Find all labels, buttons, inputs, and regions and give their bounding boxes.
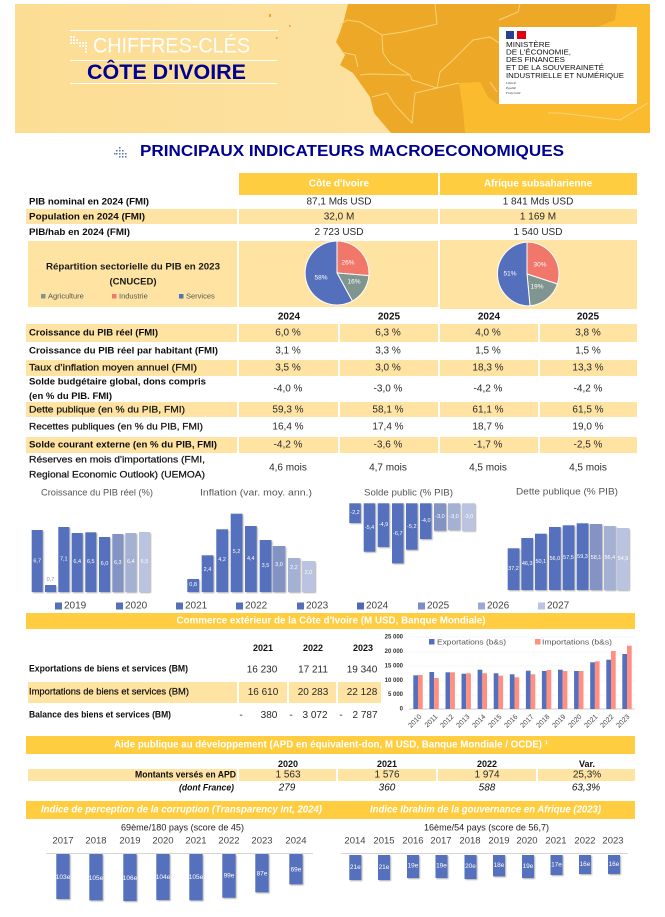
bar chart: public debt: 59,3 bbox=[577, 554, 588, 560]
table: macro indicators: Dette publique (en % du PIB, FMI) bbox=[29, 404, 185, 416]
bar chart: real GDP growth: Croissance du PIB réel (%) bbox=[41, 488, 153, 498]
pie chart: sub-Saharan Africa: 51% bbox=[503, 270, 517, 278]
table: macro indicators: 6,3 % bbox=[375, 328, 401, 338]
table: development aid: 360 bbox=[379, 782, 396, 794]
table: headline indicators: PIB/hab en 2024 (FMI) bbox=[29, 227, 130, 238]
table: macro indicators: Taux d’inflation moyen annuel (FMI) bbox=[29, 362, 197, 374]
table: macro indicators: 61,5 % bbox=[572, 404, 604, 416]
table: headline indicators: 1 841 Mds USD bbox=[503, 196, 573, 208]
chart legend: years: 2026 bbox=[487, 600, 510, 612]
table: macro indicators: 13,3 % bbox=[572, 362, 604, 374]
table: macro indicators: Regional Economic Outlook) (UEMOA) bbox=[29, 470, 205, 480]
table: macro indicators: -3,0 % bbox=[374, 384, 403, 394]
table: headline indicators bbox=[26, 173, 637, 238]
table: trade: Balance des biens et services (BM) bbox=[29, 710, 171, 720]
table: trade: 16 230 bbox=[247, 664, 278, 676]
chart legend: years: 2023 bbox=[306, 600, 329, 612]
bar chart: inflation: 5,2 bbox=[233, 549, 240, 555]
bar chart: Ibrahim governance rank: 20e bbox=[465, 863, 476, 870]
bar chart: corruption perception rank: 103e bbox=[56, 874, 71, 881]
bar chart: exports and imports: 2019 bbox=[552, 713, 568, 729]
table: development aid: 1 576 bbox=[374, 770, 400, 780]
chart legend: years: 2020 bbox=[125, 600, 148, 612]
table: macro indicators: -3,6 % bbox=[374, 440, 403, 450]
bar chart: exports and imports: 2012 bbox=[440, 713, 456, 729]
table: headline indicators: 1 169 M bbox=[520, 212, 556, 222]
bar chart: exports and imports bbox=[385, 634, 635, 729]
chart legend: years: 2019 bbox=[64, 600, 87, 612]
table: macro indicators: 3,0 % bbox=[375, 362, 401, 374]
table: macro indicators: 4,0 % bbox=[475, 328, 501, 338]
bar chart: exports and imports: 0 bbox=[400, 706, 404, 712]
bar chart: Ibrahim governance rank: 2023 bbox=[602, 836, 624, 846]
bar chart: corruption perception rank: 87e bbox=[257, 870, 268, 878]
table: trade: 2022 bbox=[303, 643, 323, 653]
table: headline indicators: 87,1 Mds USD bbox=[306, 196, 372, 208]
bar chart: exports and imports: 2023 bbox=[616, 713, 632, 729]
table: macro indicators: 16,4 % bbox=[272, 422, 304, 432]
bar chart: public debt: 54,9 bbox=[618, 556, 628, 562]
pie chart: Côte d'Ivoire bbox=[305, 241, 369, 305]
bar chart: corruption perception rank bbox=[46, 822, 313, 901]
decorative dots beside title bbox=[70, 36, 87, 53]
ministry logo: Égalité bbox=[505, 85, 517, 90]
pie chart: sub-Saharan Africa bbox=[497, 242, 559, 306]
table: macro indicators: 4,5 mois bbox=[569, 462, 607, 474]
bar chart: corruption perception rank: 2019 bbox=[119, 836, 141, 846]
ministry logo: DE L'ÉCONOMIE, bbox=[506, 48, 571, 56]
bar chart: exports and imports: 2021 bbox=[584, 713, 600, 729]
icon: heading dots bbox=[114, 147, 126, 158]
bar chart: exports and imports: 2020 bbox=[568, 713, 584, 729]
heading: principaux indicateurs: PRINCIPAUX INDICATEURS MACROECONOMIQUES bbox=[140, 143, 564, 160]
table: macro indicators: 2025 bbox=[378, 312, 401, 322]
chart legend: years bbox=[55, 600, 570, 612]
section header: trade bbox=[26, 613, 635, 629]
bar chart: corruption perception rank: 106e bbox=[123, 875, 138, 882]
bar chart: inflation: 0,8 bbox=[189, 582, 197, 588]
table: development aid: Montants versés en APD bbox=[135, 770, 236, 780]
pie legend: Agriculture bbox=[48, 292, 84, 300]
table: macro indicators: -4,2 % bbox=[474, 384, 503, 394]
table: macro indicators: 61,1 % bbox=[472, 404, 504, 416]
table: development aid: Var. bbox=[579, 759, 595, 769]
bar chart: Ibrahim governance rank: 19e bbox=[408, 862, 419, 870]
bar chart: exports and imports: 2014 bbox=[472, 713, 488, 729]
table: trade: Importations de biens et services (BM) bbox=[29, 686, 189, 698]
pie chart: sub-Saharan Africa: 30% bbox=[533, 262, 547, 268]
bar chart: Ibrahim governance rank bbox=[341, 822, 628, 880]
bar chart: corruption perception rank: 104e bbox=[156, 874, 171, 881]
bar chart: exports and imports: 20 000 bbox=[385, 649, 404, 655]
bar chart: exports and imports: 2011 bbox=[424, 713, 440, 729]
table: headline indicators: 1 540 USD bbox=[514, 227, 562, 238]
section header: governance indices bbox=[26, 801, 635, 819]
table: trade: 22 128 bbox=[347, 687, 378, 698]
bar chart: inflation: 3,0 bbox=[275, 562, 283, 568]
table: trade bbox=[28, 643, 381, 721]
banner bbox=[15, 4, 650, 133]
bar chart: corruption perception rank: 105e bbox=[189, 874, 204, 881]
bar chart: corruption perception rank: 105e bbox=[89, 875, 104, 882]
map of West Africa bbox=[336, 4, 650, 133]
ministry logo: Fraternité bbox=[505, 91, 521, 95]
section header: development aid: Aide publique au développement (APD en équivalent-don, M USD, Banque Mondiale / OCDE) ¹ bbox=[114, 740, 549, 750]
bar chart: public debt: 56,4 bbox=[604, 555, 615, 561]
pie chart: sub-Saharan Africa: 19% bbox=[530, 284, 544, 290]
table: macro indicators: 58,1 % bbox=[372, 404, 404, 416]
bar chart: corruption perception rank: 2022 bbox=[218, 836, 240, 846]
bar chart: Ibrahim governance rank: 17e bbox=[551, 862, 562, 868]
ministry logo: DES FINANCES bbox=[506, 55, 565, 64]
bar chart: Ibrahim governance rank: 21e bbox=[350, 864, 361, 871]
bar chart: public balance: -4,0 bbox=[421, 518, 431, 524]
table: macro indicators: 3,8 % bbox=[575, 328, 601, 338]
bar chart: Ibrahim governance rank: 16ème/54 pays (score de 56,7) bbox=[424, 822, 549, 834]
bar chart: corruption perception rank: 2021 bbox=[185, 836, 207, 846]
bar chart: inflation: 2,2 bbox=[290, 565, 298, 571]
table: macro indicators: 4,6 mois bbox=[269, 462, 307, 474]
pie chart: Côte d'Ivoire: 16% bbox=[347, 278, 361, 286]
bar chart: Ibrahim governance rank: 19e bbox=[523, 863, 534, 870]
bar chart: Ibrahim governance rank: 19e bbox=[436, 862, 447, 870]
bar chart: public balance: -6,7 bbox=[393, 531, 403, 537]
bar chart: public debt: 46,3 bbox=[522, 561, 533, 567]
table: macro indicators: 4,7 mois bbox=[369, 462, 407, 474]
table: trade: 17 211 bbox=[298, 664, 328, 676]
pie legend: Services bbox=[186, 292, 215, 300]
bar chart: real GDP growth: 0,7 bbox=[47, 577, 54, 583]
table: macro indicators: 3,5 % bbox=[275, 362, 301, 374]
bar chart: Ibrahim governance rank: 2019 bbox=[488, 836, 510, 846]
bar chart: Ibrahim governance rank: 2014 bbox=[344, 836, 366, 846]
table: trade: 2021 bbox=[253, 643, 273, 653]
bar chart: corruption perception rank: 2024 bbox=[285, 836, 307, 846]
bar chart: public balance: -5,4 bbox=[365, 525, 374, 531]
islands bbox=[269, 14, 290, 39]
bar chart: inflation: 4,2 bbox=[218, 557, 226, 563]
table: headline indicators: PIB nominal en 2024 (FMI) bbox=[29, 196, 149, 208]
table: macro indicators bbox=[26, 312, 637, 480]
ministry logo: INDUSTRIELLE ET NUMÉRIQUE bbox=[506, 71, 624, 80]
bar chart: real GDP growth: 6,4 bbox=[127, 559, 135, 565]
bar chart: inflation bbox=[187, 488, 315, 592]
legend: exports / imports bbox=[429, 638, 613, 646]
bar chart: Ibrahim governance rank: 2015 bbox=[373, 836, 395, 846]
bar chart: exports and imports: 2018 bbox=[536, 713, 552, 729]
pie legend bbox=[41, 292, 215, 300]
table: headline indicators: Population en 2024 (FMI) bbox=[29, 212, 145, 222]
section header: governance indices: Indice de perception de la corruption (Transparency Int, 2024) bbox=[41, 804, 323, 816]
table: macro indicators: 18,3 % bbox=[472, 362, 504, 374]
section header: development aid bbox=[26, 736, 635, 754]
bar chart: public balance: -2,2 bbox=[350, 510, 360, 516]
table: macro indicators: 6,0 % bbox=[275, 328, 301, 338]
chart legend: years: 2027 bbox=[547, 600, 570, 612]
table: macro indicators: 18,7 % bbox=[472, 422, 504, 432]
table: trade: 20 283 bbox=[298, 687, 329, 698]
bar chart: public balance: -5,2 bbox=[407, 524, 417, 530]
table: trade: 2 787 bbox=[352, 710, 378, 721]
bar chart: public debt: 58,1 bbox=[591, 555, 601, 561]
bar chart: public debt: 57,5 bbox=[563, 555, 574, 561]
table: headline indicators: Afrique subsaharienne bbox=[484, 178, 593, 190]
pie chart: Côte d'Ivoire: 58% bbox=[314, 274, 328, 282]
table: development aid: 2022 bbox=[477, 759, 497, 769]
bar chart: Ibrahim governance rank: 21e bbox=[379, 864, 390, 871]
table: development aid: 2021 bbox=[377, 759, 397, 769]
title: Côte d'Ivoire: CÔTE D'IVOIRE bbox=[87, 60, 246, 84]
bar chart: corruption perception rank: 2020 bbox=[152, 836, 174, 846]
table: macro indicators: 17,4 % bbox=[372, 422, 404, 432]
table: macro indicators: Solde courant externe (en % du PIB, FMI) bbox=[29, 440, 217, 450]
bar chart: Ibrahim governance rank: 16e bbox=[580, 861, 591, 868]
bar chart: exports and imports: 2017 bbox=[520, 713, 536, 729]
table: macro indicators: 19,0 % bbox=[572, 422, 604, 432]
bar chart: real GDP growth: 6,7 bbox=[33, 558, 41, 564]
title: chiffres-clés: CHIFFRES-CLÉS bbox=[93, 34, 250, 58]
bar chart: exports and imports: 2013 bbox=[456, 713, 472, 729]
table: development aid: 63,3% bbox=[572, 782, 600, 794]
bar chart: corruption perception rank: 69e bbox=[291, 866, 302, 874]
panel: sector breakdown: Répartition sectorielle du PIB en 2023 bbox=[46, 262, 220, 272]
ministry logo: MINISTÈRE bbox=[506, 40, 550, 49]
bar chart: real GDP growth: 7,1 bbox=[60, 556, 68, 562]
bar chart: inflation: Inflation (var. moy. ann.) bbox=[200, 488, 312, 498]
bar chart: corruption perception rank: 2023 bbox=[251, 836, 273, 846]
panel: sector breakdown: (CNUCED) bbox=[110, 276, 156, 288]
table: development aid bbox=[28, 759, 635, 794]
table: macro indicators: 1,5 % bbox=[475, 346, 501, 356]
table: development aid: 279 bbox=[278, 782, 296, 794]
table: trade: - bbox=[289, 710, 293, 721]
table: macro indicators: 2025 bbox=[577, 312, 600, 322]
bar chart: exports and imports: 15 000 bbox=[385, 664, 404, 670]
table: trade: 3 072 bbox=[302, 710, 328, 721]
bar chart: public balance: -3,0 bbox=[464, 514, 473, 520]
table: macro indicators: 3,1 % bbox=[275, 346, 301, 356]
bar chart: exports and imports: 2010 bbox=[408, 713, 424, 729]
table: macro indicators: (en % du PIB. FMI) bbox=[29, 391, 112, 402]
bar chart: inflation: 3,5 bbox=[262, 563, 269, 569]
table: headline indicators: 2 723 USD bbox=[315, 227, 363, 238]
bar chart: Ibrahim governance rank: 2022 bbox=[574, 836, 596, 846]
bar chart: public balance: Solde public (% PIB) bbox=[364, 488, 453, 498]
table: trade: 2023 bbox=[353, 643, 373, 653]
pie chart: Côte d'Ivoire: 26% bbox=[341, 260, 355, 266]
table: macro indicators: Recettes publiques (en % du PIB, FMI) bbox=[29, 422, 203, 432]
bar chart: corruption perception rank: 2018 bbox=[85, 836, 107, 846]
bar chart: public debt: 50,1 bbox=[535, 559, 546, 565]
table: macro indicators: 2024 bbox=[278, 312, 301, 322]
bar chart: public balance bbox=[349, 488, 475, 563]
table: development aid: 25,3% bbox=[573, 770, 601, 780]
bar chart: public debt: 37,2 bbox=[508, 566, 519, 572]
bar chart: Ibrahim governance rank: 2021 bbox=[545, 836, 567, 846]
table: macro indicators: 2024 bbox=[478, 312, 501, 322]
bar chart: public balance: -4,9 bbox=[379, 522, 388, 528]
bar chart: Ibrahim governance rank: 2016 bbox=[402, 836, 424, 846]
bar chart: Ibrahim governance rank: 2018 bbox=[459, 836, 481, 846]
ministry logo bbox=[499, 27, 637, 104]
chart legend: years: 2021 bbox=[185, 600, 208, 612]
ministry logo: ET DE LA SOUVERAINETÉ bbox=[506, 63, 604, 72]
table: trade: - bbox=[239, 710, 243, 721]
bar chart: inflation: 4,4 bbox=[247, 556, 255, 562]
legend: exports / imports: Exportations (b&s) bbox=[437, 638, 507, 646]
table: headline indicators: 32,0 M bbox=[324, 212, 354, 222]
bar chart: inflation: 2,4 bbox=[204, 567, 211, 573]
table: macro indicators: -1,7 % bbox=[474, 440, 503, 450]
pie legend: Industrie bbox=[119, 292, 148, 300]
table: macro indicators: -2,5 % bbox=[574, 440, 603, 450]
ministry logo: Liberté bbox=[505, 81, 517, 85]
bar chart: real GDP growth: 6,3 bbox=[114, 560, 122, 566]
bar chart: exports and imports: 5 000 bbox=[388, 692, 404, 698]
table: development aid: 588 bbox=[479, 782, 496, 794]
bar chart: Ibrahim governance rank: 18e bbox=[494, 862, 505, 869]
table: development aid: (dont France) bbox=[179, 782, 234, 794]
table: trade: 19 340 bbox=[347, 664, 378, 676]
table: headline indicators: Côte d'Ivoire bbox=[309, 178, 370, 190]
bar chart: exports and imports: 25 000 bbox=[385, 634, 404, 640]
bar chart: public debt: Dette publique (% PIB) bbox=[516, 486, 618, 498]
table: trade: 380 bbox=[261, 710, 278, 721]
table: macro indicators: -4,2 % bbox=[574, 384, 603, 394]
table: development aid: 2020 bbox=[278, 759, 298, 769]
bar chart: public balance: -3,0 bbox=[435, 514, 445, 520]
bar chart: Ibrahim governance rank: 2020 bbox=[516, 836, 538, 846]
bar chart: public debt: 56,0 bbox=[549, 556, 560, 562]
bar chart: corruption perception rank: 69ème/180 pays (score de 45) bbox=[121, 822, 244, 834]
table: macro indicators: 3,3 % bbox=[375, 346, 401, 356]
bar chart: real GDP growth: 6,5 bbox=[87, 559, 95, 565]
bar chart: public balance: -3,0 bbox=[449, 514, 459, 520]
table: development aid: 1 563 bbox=[275, 770, 301, 780]
table: macro indicators: Croissance du PIB réel (FMI) bbox=[29, 328, 158, 338]
table: development aid: 1 974 bbox=[474, 770, 500, 780]
table: trade: - bbox=[339, 710, 343, 721]
chart legend: years: 2022 bbox=[245, 600, 268, 612]
chart legend: years: 2025 bbox=[427, 600, 450, 612]
section header: trade: Commerce extérieur de la Côte d'Ivoire (M USD, Banque Mondiale) bbox=[176, 616, 486, 626]
table: macro indicators: 59,3 % bbox=[272, 404, 304, 416]
bar chart: real GDP growth: 6,5 bbox=[141, 559, 148, 565]
table: macro indicators: 1,5 % bbox=[575, 346, 601, 356]
table: macro indicators: -4,0 % bbox=[274, 384, 303, 394]
legend: exports / imports: Importations (b&s) bbox=[542, 638, 613, 646]
bar chart: corruption perception rank: 2017 bbox=[52, 836, 74, 846]
bar chart: public debt bbox=[508, 486, 629, 590]
bar chart: corruption perception rank: 99e bbox=[224, 872, 235, 880]
table: macro indicators: 4,5 mois bbox=[469, 462, 507, 474]
table: macro indicators: Croissance du PIB réel par habitant (FMI) bbox=[29, 346, 218, 356]
section header: governance indices: Indice Ibrahim de la gouvernance en Afrique (2023) bbox=[370, 804, 602, 816]
bar chart: exports and imports: 10 000 bbox=[385, 678, 404, 684]
bar chart: Ibrahim governance rank: 2017 bbox=[430, 836, 452, 846]
table: macro indicators: Réserves en mois d'importations (FMI, bbox=[29, 454, 205, 466]
bar chart: real GDP growth: 6,4 bbox=[73, 559, 81, 565]
table: macro indicators: Solde budgétaire global, dons compris bbox=[29, 376, 206, 388]
bar chart: exports and imports: 2015 bbox=[488, 713, 504, 729]
panel: sector breakdown bbox=[28, 240, 637, 309]
bar chart: Ibrahim governance rank: 16e bbox=[609, 861, 620, 868]
bar chart: exports and imports: 2022 bbox=[600, 713, 616, 729]
bar chart: inflation: 2,0 bbox=[305, 570, 312, 576]
table: macro indicators: -4,2 % bbox=[274, 440, 303, 450]
table: trade: Exportations de biens et services (BM) bbox=[29, 664, 188, 674]
bar chart: real GDP growth: 6,0 bbox=[101, 561, 108, 567]
chart legend: years: 2024 bbox=[366, 600, 389, 612]
bar chart: exports and imports: 2016 bbox=[504, 713, 520, 729]
table: trade: 16 610 bbox=[248, 687, 279, 698]
bar chart: real GDP growth bbox=[32, 488, 153, 592]
